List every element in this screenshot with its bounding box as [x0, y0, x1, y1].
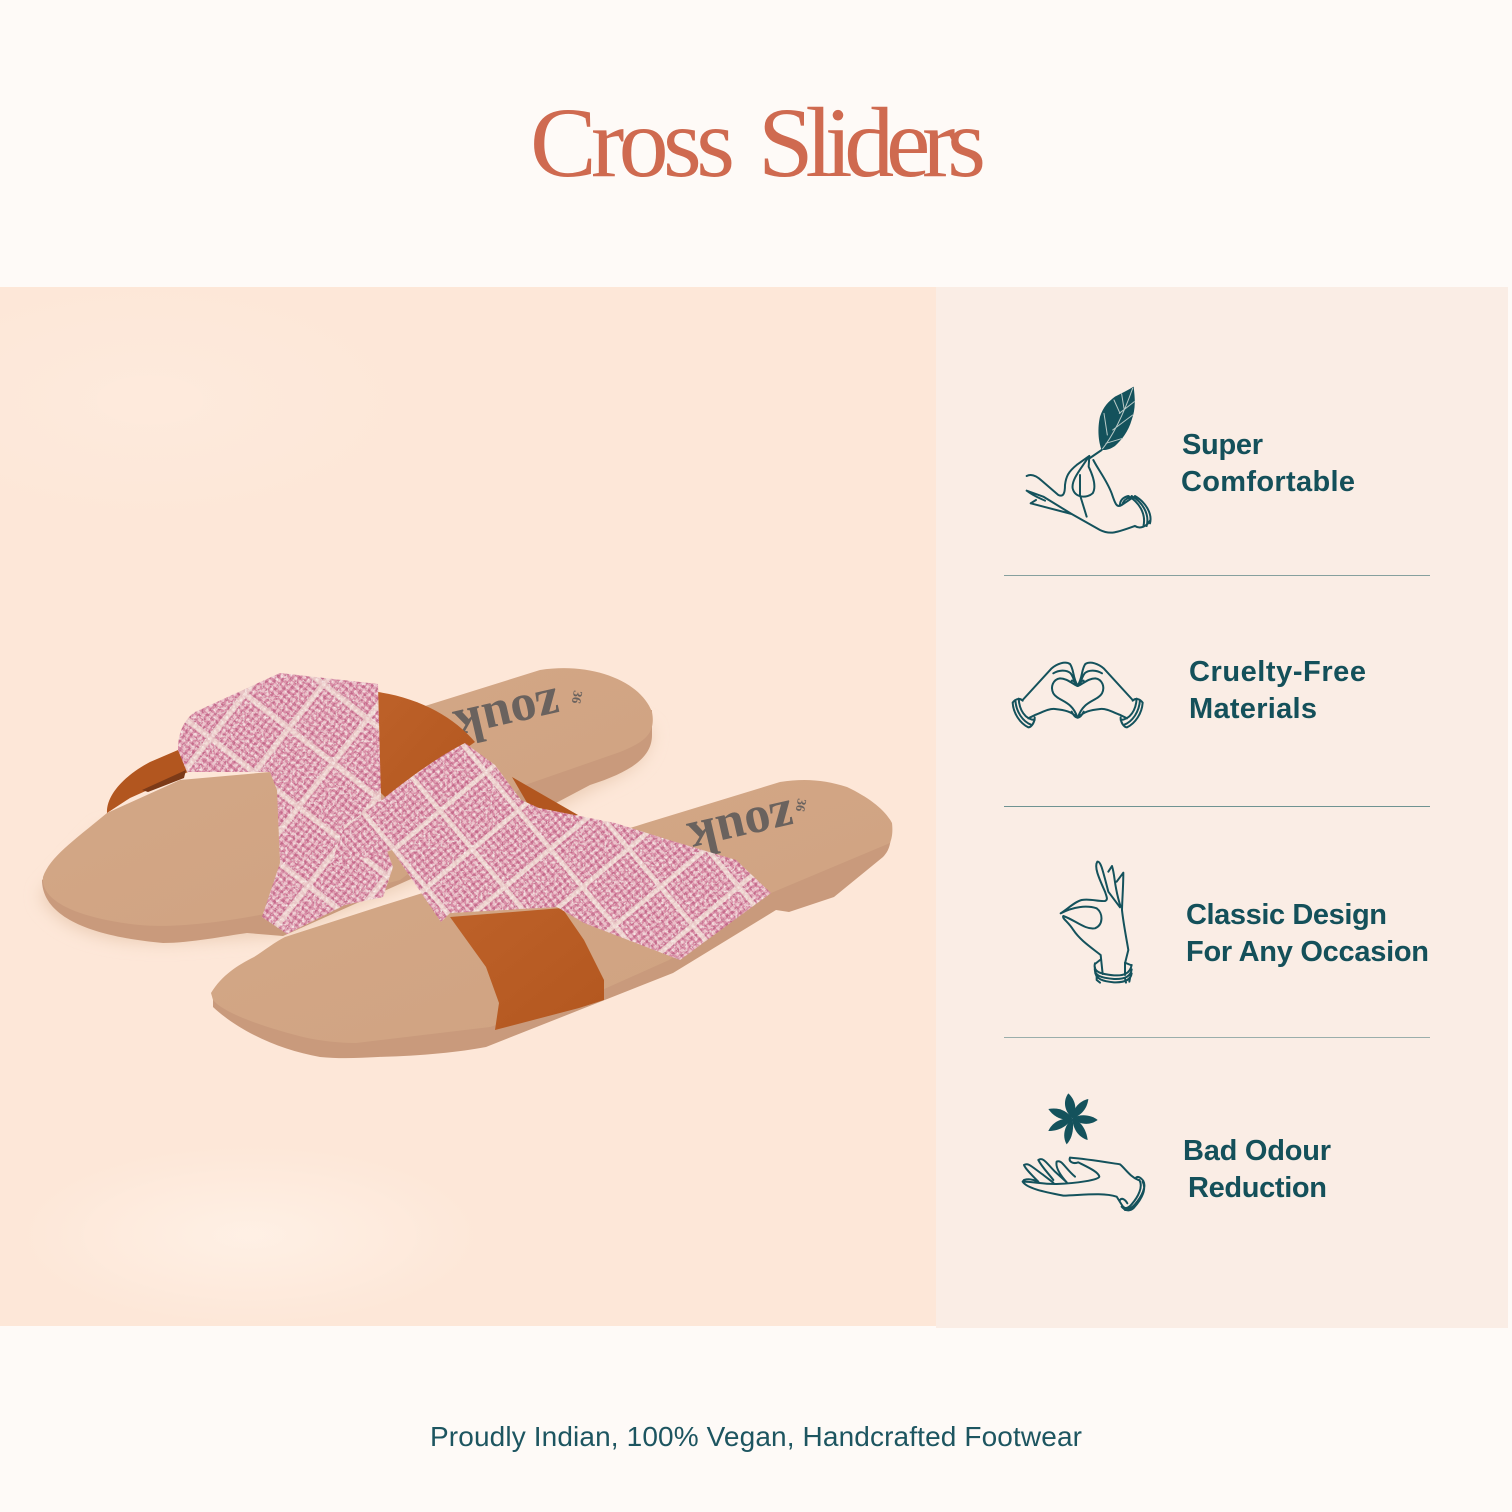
icon: ok hand gesture	[1061, 862, 1132, 983]
divider 2	[1004, 806, 1430, 808]
title: Sliders	[758, 87, 986, 198]
left leather strap	[107, 750, 188, 813]
panel: product photo	[0, 280, 936, 1326]
label: comfortable: Comfortable	[1181, 466, 1355, 498]
size mark: back insole: 36	[569, 689, 586, 705]
icon: hand holding leaf	[1027, 387, 1151, 533]
panel: features	[936, 287, 1508, 1328]
label: cruelty-free: Cruelty-Free	[1189, 656, 1366, 688]
back sandal	[40, 668, 653, 943]
lower leather strap	[450, 908, 604, 1030]
right leather strap	[378, 692, 475, 802]
upper leather strap	[512, 777, 578, 825]
pink fabric strap: back sandal	[178, 673, 393, 934]
label: for any occasion: For Any Occasion	[1186, 936, 1429, 968]
feature: classic design	[1061, 862, 1387, 983]
brand mark: front insole: zouk	[683, 788, 800, 868]
label: materials: Materials	[1189, 693, 1317, 725]
label: super: Super	[1182, 429, 1263, 461]
brand mark: back insole: zouk	[449, 676, 566, 756]
strap shadow	[142, 770, 186, 792]
icon: flower above open hand	[1023, 1093, 1144, 1210]
label: bad odour: Bad Odour	[1183, 1135, 1331, 1167]
title: Cross	[530, 87, 735, 198]
feature: bad odour reduction	[1023, 1093, 1331, 1210]
icon: heart hands	[1013, 663, 1143, 727]
pink fabric strap: front sandal	[330, 743, 771, 960]
label: reduction: Reduction	[1188, 1172, 1327, 1204]
feature: cruelty-free	[1013, 656, 1366, 727]
footer tagline: Proudly Indian, 100% Vegan, Handcrafted Footwear	[430, 1421, 1082, 1452]
size mark: front insole: 36	[793, 797, 810, 813]
divider 3	[1004, 1036, 1430, 1038]
divider 1	[1004, 574, 1430, 576]
front sandal	[211, 743, 892, 1058]
label: classic design: Classic Design	[1186, 899, 1387, 931]
feature: super comfortable	[1027, 387, 1263, 533]
title	[530, 87, 986, 198]
